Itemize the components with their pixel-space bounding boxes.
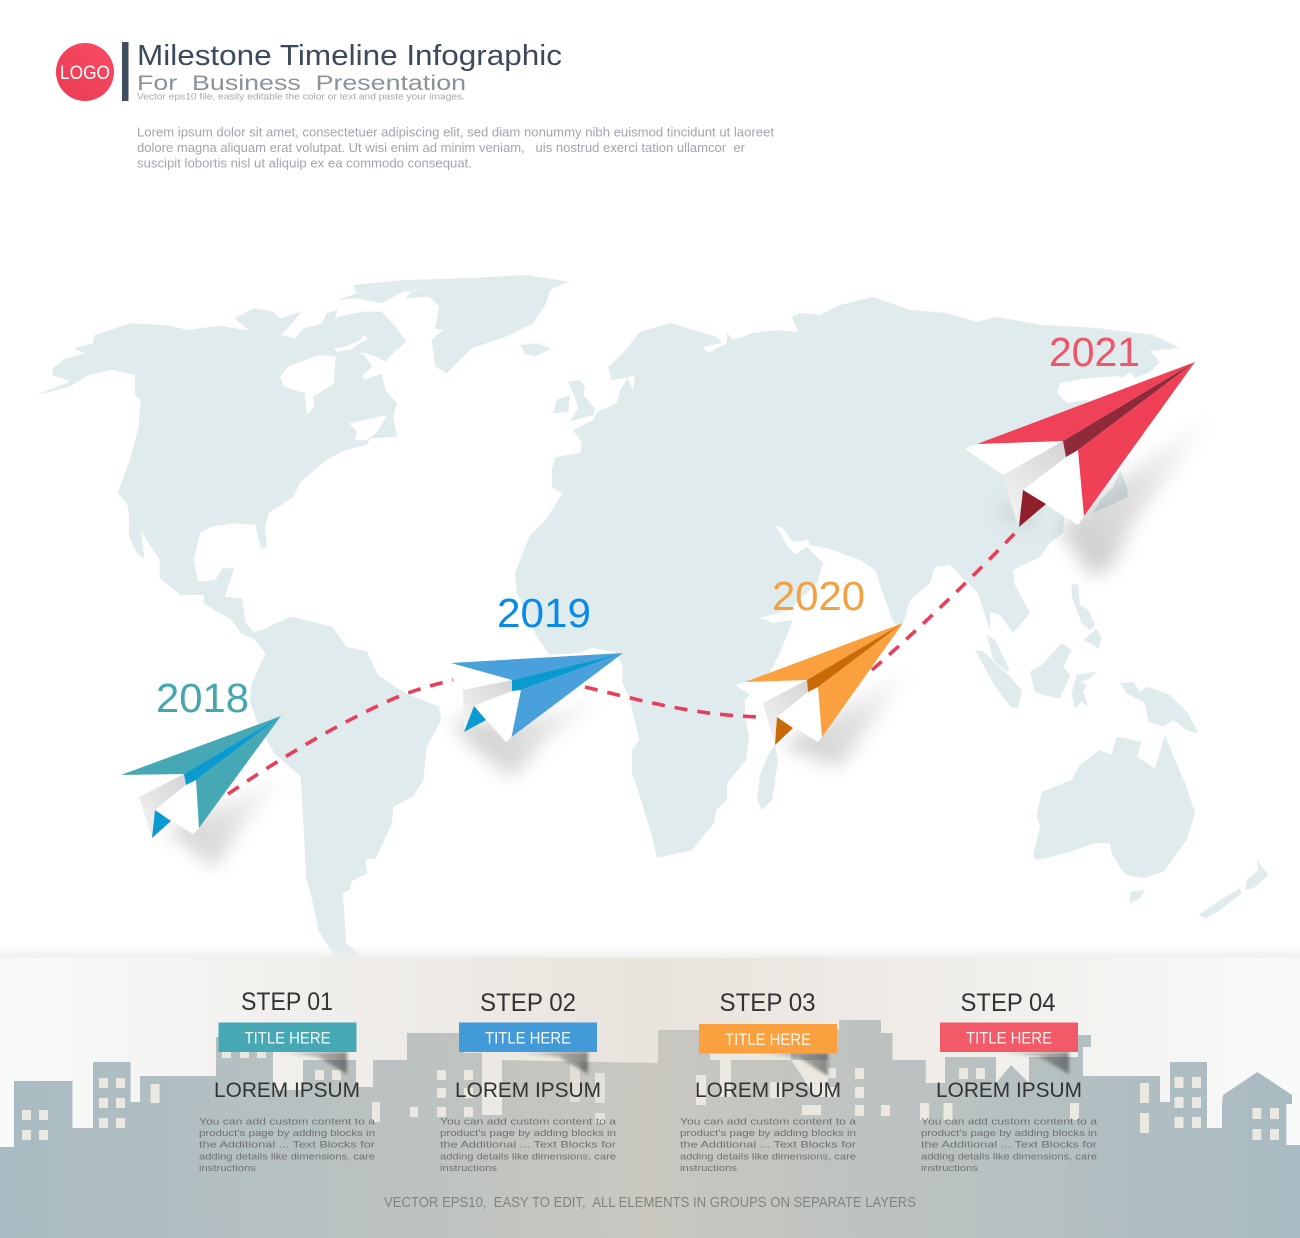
Britain, Ireland and Iceland <box>520 343 595 422</box>
step 01: the Additional ... Text Blocks for <box>199 1140 375 1150</box>
South America <box>227 613 441 962</box>
step 01: STEP 01 <box>241 988 333 1016</box>
step 04: instructions <box>921 1163 978 1174</box>
step 03: TITLE HERE <box>725 1030 811 1049</box>
header divider bar <box>122 42 128 101</box>
step 03: You can add custom content to a <box>680 1116 857 1128</box>
intro paragraph: dolore magna aliquam erat volutpat. Ut wisi enim ad minim veniam, uis nostrud exerci tation ullamcor er <box>137 141 745 155</box>
small caption: Vector eps10 file, easily editable the color or text and paste your images. <box>137 92 465 102</box>
step 02: instructions <box>440 1163 497 1174</box>
subtitle: For Business Presentation <box>137 72 466 95</box>
step 01: You can add custom content to a <box>199 1116 376 1128</box>
North America and Greenland <box>31 275 569 642</box>
step 02: You can add custom content to a <box>440 1116 617 1128</box>
plane shadows <box>165 410 1217 868</box>
step 02: product's page by adding blocks in <box>440 1128 616 1139</box>
building windows <box>22 1052 1279 1140</box>
plane and year 2021 <box>965 329 1195 527</box>
footer panel <box>0 958 1300 1238</box>
step 02: adding details like dimensions, care <box>440 1152 616 1162</box>
step 01: product's page by adding blocks in <box>199 1128 375 1139</box>
step 04: STEP 04 <box>960 989 1056 1017</box>
header <box>56 40 775 170</box>
step 03 <box>680 989 857 1174</box>
step 03: LOREM IPSUM <box>695 1079 841 1102</box>
step 02: LOREM IPSUM <box>455 1079 601 1102</box>
step 04: the Additional ... Text Blocks for <box>921 1140 1097 1150</box>
step 03: adding details like dimensions, care <box>680 1152 856 1162</box>
logo badge <box>56 43 114 101</box>
step 02: TITLE HERE <box>485 1028 571 1048</box>
intro paragraph: suscipit lobortis nisl ut aliquip ex ea commodo consequat. <box>137 156 472 170</box>
step 02: the Additional ... Text Blocks for <box>440 1140 616 1150</box>
logo badge: LOGO <box>60 63 110 84</box>
intro paragraph <box>137 126 775 170</box>
step 01: TITLE HERE <box>244 1028 330 1048</box>
step 02: STEP 02 <box>480 989 576 1017</box>
step 04: TITLE HERE <box>966 1028 1052 1048</box>
step 02 <box>440 989 617 1174</box>
step 04 <box>921 989 1098 1174</box>
plane and year 2018 <box>110 675 281 838</box>
step 01: adding details like dimensions, care <box>199 1152 375 1162</box>
step 01 <box>199 988 376 1174</box>
step 01: instructions <box>199 1163 256 1174</box>
Southeast Asia and Oceania <box>975 583 1268 918</box>
intro paragraph: Lorem ipsum dolor sit amet, consectetuer adipiscing elit, sed diam nonummy nibh euismod tincidunt ut laoreet <box>137 126 775 140</box>
step 04: LOREM IPSUM <box>936 1079 1082 1102</box>
plane and year 2019: 2019 <box>497 590 591 636</box>
plane and year 2020: 2020 <box>772 573 865 619</box>
plane and year 2020 <box>735 573 903 745</box>
world map <box>31 275 1268 962</box>
plane and year 2019 <box>441 590 623 742</box>
step 03: product's page by adding blocks in <box>680 1128 856 1139</box>
city skyline <box>0 1020 1300 1238</box>
Japan <box>1093 470 1128 513</box>
plane and year 2018: 2018 <box>156 675 249 721</box>
plane and year 2021: 2021 <box>1049 329 1140 375</box>
step 04: You can add custom content to a <box>921 1116 1098 1128</box>
dashed flight path <box>228 528 1020 794</box>
footer note: VECTOR EPS10, EASY TO EDIT, ALL ELEMENTS IN GROUPS ON SEPARATE LAYERS <box>384 1194 916 1211</box>
step 01: LOREM IPSUM <box>214 1079 360 1102</box>
step 04: product's page by adding blocks in <box>921 1128 1097 1139</box>
Eurasia and Africa <box>515 297 1180 858</box>
title: Milestone Timeline Infographic <box>137 40 562 72</box>
step 03: the Additional ... Text Blocks for <box>680 1140 856 1150</box>
Madagascar <box>757 745 778 810</box>
step 03: instructions <box>680 1163 737 1174</box>
step 04: adding details like dimensions, care <box>921 1152 1097 1162</box>
step 03: STEP 03 <box>720 989 816 1017</box>
top fade of footer <box>0 945 1300 958</box>
